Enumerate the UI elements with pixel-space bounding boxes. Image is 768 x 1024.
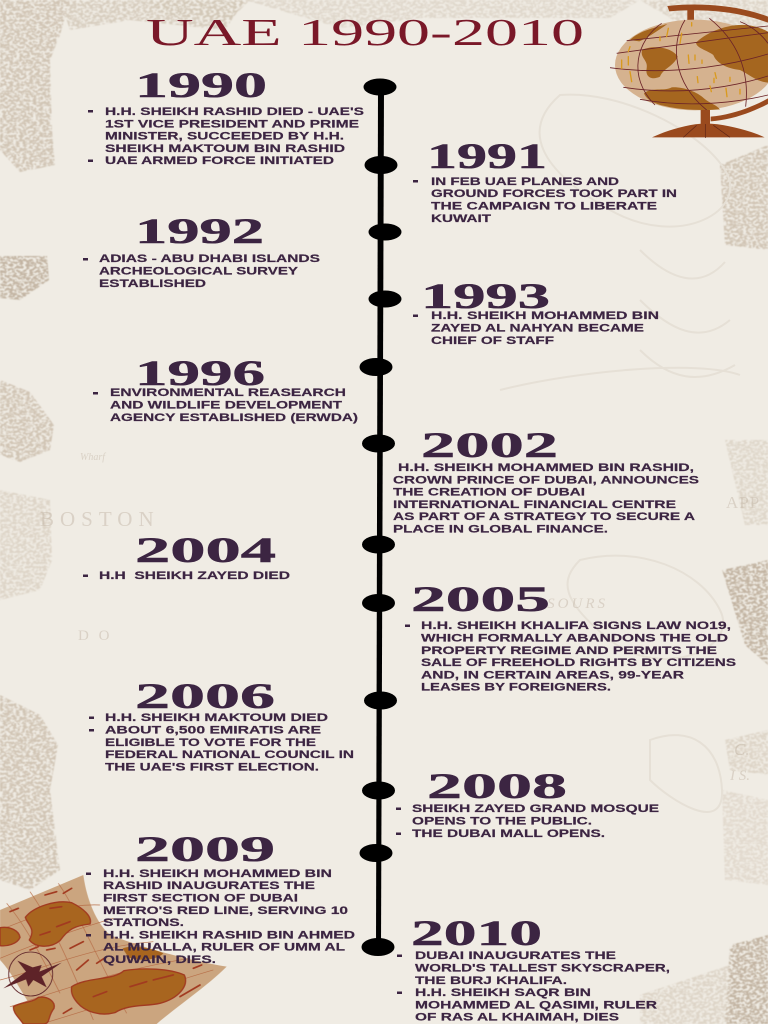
text: 1996 events: AND WILDLIFE DEVELOPMENT (110, 400, 343, 412)
text: 1991 events (413, 176, 677, 225)
text: 2005 events: H.H. SHEIKH KHALIFA SIGNS LAW NO19, (421, 620, 731, 632)
parchment background: D O (78, 628, 112, 644)
parchment background: Wharf (80, 452, 106, 463)
year: 1993: 1993 (421, 276, 550, 316)
text: 2010 events: H.H. SHEIKH SAQR BIN (415, 987, 591, 999)
timeline spine and nodes (360, 78, 402, 956)
text: 2008 events: THE DUBAI MALL OPENS. (412, 828, 605, 840)
parchment background: BOSTON (40, 507, 160, 531)
year: 1990: 1990 (135, 65, 267, 105)
year: 2009: 2009 (135, 829, 275, 869)
text: 1996 events: AGENCY ESTABLISHED (ERWDA) (110, 412, 359, 424)
text: 1993 events: CHIEF OF STAFF (431, 335, 555, 347)
entry: 2005 (405, 579, 736, 694)
entry: 2002 (393, 425, 699, 536)
text: 2006 events: ELIGIBLE TO VOTE FOR THE (105, 737, 316, 749)
text: 2006 events (89, 712, 354, 774)
text: 1990 events: SHEIKH MAKTOUM BIN RASHID (105, 143, 345, 155)
entry: 2008 (396, 766, 659, 840)
year: 1991: 1991 (427, 136, 547, 176)
year: 2002: 2002 (421, 425, 558, 465)
illustration: globe (610, 5, 768, 138)
text: 1990 events: MINISTER, SUCCEEDED BY H.H. (105, 130, 344, 142)
text: 2006 events: ABOUT 6,500 EMIRATIS ARE (105, 724, 321, 736)
text: 2009 events: H.H. SHEIKH RASHID BIN AHMED (103, 930, 355, 942)
text: 2009 events: QUWAIN, DIES. (103, 954, 216, 966)
text: 2002 events: THE CREATION OF DUBAI (393, 486, 585, 498)
text: 2005 events (405, 620, 736, 694)
text: 2002 events: CROWN PRINCE OF DUBAI, ANNOUNCES (393, 474, 699, 486)
entry: 1990 (88, 65, 364, 167)
text: 2002 events: AS PART OF A STRATEGY TO SECURE A (393, 511, 695, 523)
text: 2010 events (397, 950, 670, 1024)
text: 1993 events: ZAYED AL NAHYAN BECAME (431, 322, 644, 334)
text: 2010 events: THE BURJ KHALIFA. (415, 975, 567, 987)
text: 2004 events: H.H SHEIKH ZAYED DIED (99, 570, 290, 582)
text: 2005 events: LEASES BY FOREIGNERS. (421, 682, 611, 694)
text: 2009 events: METRO'S RED LINE, SERVING 10 (103, 905, 348, 917)
text: 1990 events: 1ST VICE PRESIDENT AND PRIME (105, 118, 359, 130)
text: 2008 events: SHEIKH ZAYED GRAND MOSQUE (412, 803, 659, 815)
text: 1990 events (88, 106, 364, 167)
text: 1990 events: UAE ARMED FORCE INITIATED (105, 155, 334, 167)
entry: 1996 (93, 353, 359, 424)
year: 1996: 1996 (135, 353, 265, 393)
text: 2006 events: THE UAE'S FIRST ELECTION. (105, 762, 319, 774)
year: 2008: 2008 (427, 766, 567, 806)
text: 2002 events: PLACE IN GLOBAL FINANCE. (393, 524, 608, 536)
text: 2006 events: H.H. SHEIKH MAKTOUM DIED (105, 712, 328, 724)
entry: 2006 (89, 676, 354, 774)
year: 2010: 2010 (411, 913, 542, 953)
text: 2005 events: PROPERTY REGIME AND PERMITS THE (421, 645, 717, 657)
entry: 1991 (413, 136, 677, 225)
text: 2009 events: RASHID INAUGURATES THE (103, 880, 315, 892)
year: 2005: 2005 (411, 579, 550, 619)
text: 1990 events: H.H. SHEIKH RASHID DIED - UAE'S (105, 106, 364, 118)
text: 2010 events: OF RAS AL KHAIMAH, DIES (415, 1012, 619, 1024)
text: 2009 events: H.H. SHEIKH MOHAMMED BIN (103, 868, 332, 880)
text: 1992 events: ARCHEOLOGICAL SURVEY (99, 266, 299, 278)
text: 1992 events: ESTABLISHED (99, 278, 206, 290)
text: 2005 events: AND, IN CERTAIN AREAS, 99-YEAR (421, 670, 684, 682)
text: 1993 events (413, 310, 659, 347)
entry: 2009 (86, 829, 355, 966)
entry: 2010 (397, 913, 670, 1024)
text: 2010 events: DUBAI INAUGURATES THE (415, 950, 616, 962)
text: 1991 events: IN FEB UAE PLANES AND (431, 176, 619, 188)
illustration: treasure map (0, 875, 227, 1024)
parchment background: C. (734, 740, 750, 759)
entry: 1992 (83, 211, 320, 290)
text: 2008 events: OPENS TO THE PUBLIC. (412, 816, 592, 828)
text: 2009 events: FIRST SECTION OF DUBAI (103, 892, 298, 904)
text: 1992 events (83, 253, 320, 290)
entry: 2004 (83, 530, 290, 582)
text: 1993 events: H.H. SHEIKH MOHAMMED BIN (431, 310, 659, 322)
year: 1992: 1992 (135, 211, 264, 251)
text: 2002 events: INTERNATIONAL FINANCIAL CENTRE (393, 499, 676, 511)
text: 1991 events: KUWAIT (431, 213, 492, 225)
text: 2009 events: STATIONS. (103, 917, 184, 929)
year: 2004: 2004 (135, 530, 276, 570)
text: 2005 events: WHICH FORMALLY ABANDONS THE OLD (421, 632, 728, 644)
text: 2010 events: MOHAMMED AL QASIMI, RULER (415, 1000, 657, 1012)
text: 1996 events (93, 387, 359, 424)
text: 1991 events: GROUND FORCES TOOK PART IN (431, 188, 677, 200)
entry: 1993 (413, 276, 659, 347)
parchment background: APP (726, 493, 760, 512)
text: 1991 events: THE CAMPAIGN TO LIBERATE (431, 200, 657, 212)
parchment background: RSOURS (534, 596, 608, 612)
icon: compass rose (3, 952, 62, 996)
text: 2010 events: WORLD'S TALLEST SKYSCRAPER, (415, 962, 670, 974)
text: 2002 events: H.H. SHEIKH MOHAMMED BIN RASHID, (398, 462, 694, 474)
text: 2009 events: AL MUALLA, RULER OF UMM AL (103, 942, 346, 954)
text: 2005 events: SALE OF FREEHOLD RIGHTS BY CITIZENS (421, 657, 736, 669)
year: 2006: 2006 (135, 676, 275, 716)
parchment background: I S. (729, 768, 750, 784)
text: 2008 events (396, 803, 659, 840)
text: 2002 events (393, 462, 699, 536)
text: 2009 events (86, 868, 355, 966)
title: UAE 1990-2010 (146, 12, 584, 54)
text: 2006 events: FEDERAL NATIONAL COUNCIL IN (105, 749, 354, 761)
text: 1996 events: ENVIRONMENTAL REASEARCH (110, 387, 346, 399)
text: 1992 events: ADIAS - ABU DHABI ISLANDS (99, 253, 320, 265)
